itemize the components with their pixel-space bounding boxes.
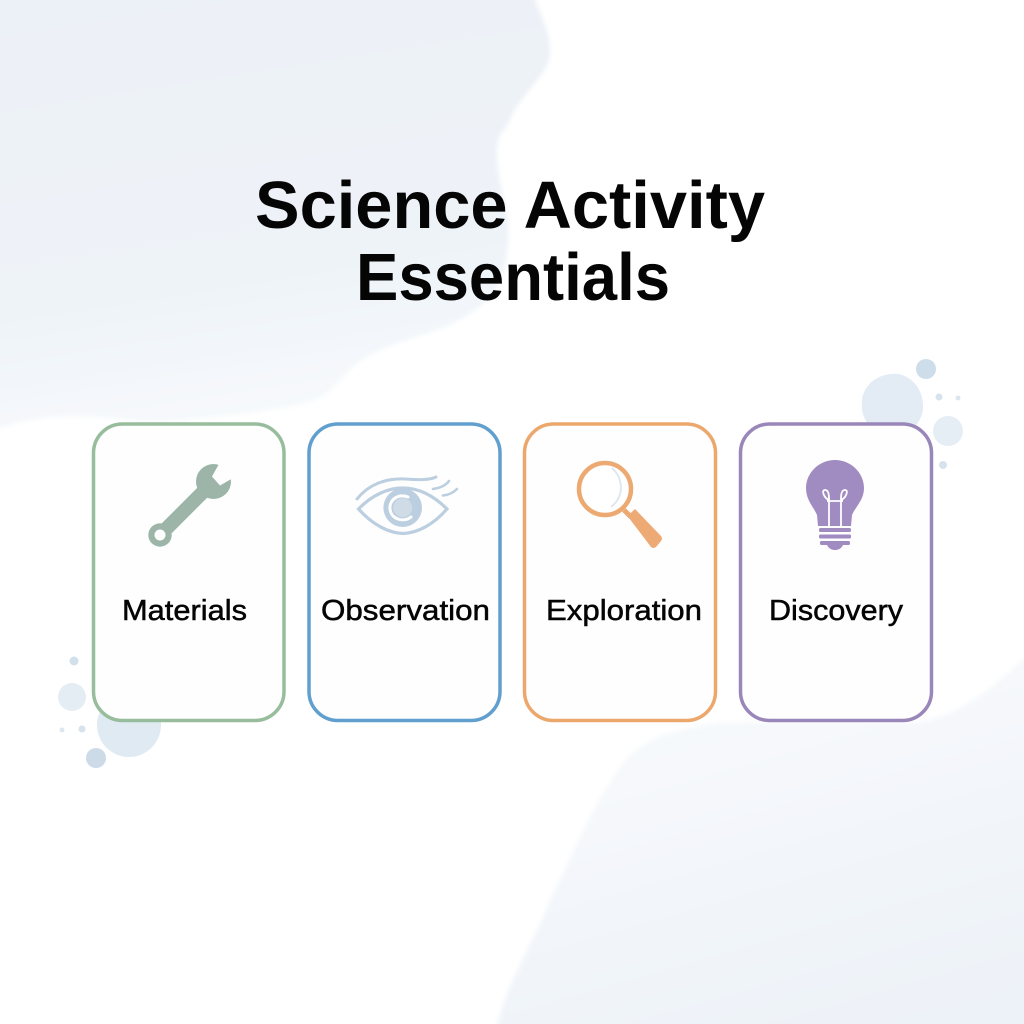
icon: light bulb: [806, 460, 864, 550]
decorative bubbles: upper right: [862, 359, 963, 469]
label: materials: Materials: [122, 595, 247, 627]
label: discovery: Discovery: [769, 595, 904, 627]
panel: exploration: [524, 424, 716, 720]
background wash: bottom right: [495, 650, 1024, 1024]
title: Science Activity: [255, 168, 765, 243]
panel: observation: [309, 424, 500, 720]
label: observation: Observation: [321, 595, 490, 627]
icon: eye: [357, 477, 457, 534]
icon: magnifying glass: [579, 463, 662, 548]
title: Essentials: [356, 240, 670, 315]
label: exploration: Exploration: [546, 595, 702, 627]
background wash: top left: [0, 0, 550, 432]
panel: discovery: [740, 424, 932, 720]
decorative bubbles: lower left: [58, 656, 161, 768]
title: [255, 168, 765, 315]
panel: materials: [94, 424, 284, 720]
icon: wrench: [148, 464, 233, 547]
